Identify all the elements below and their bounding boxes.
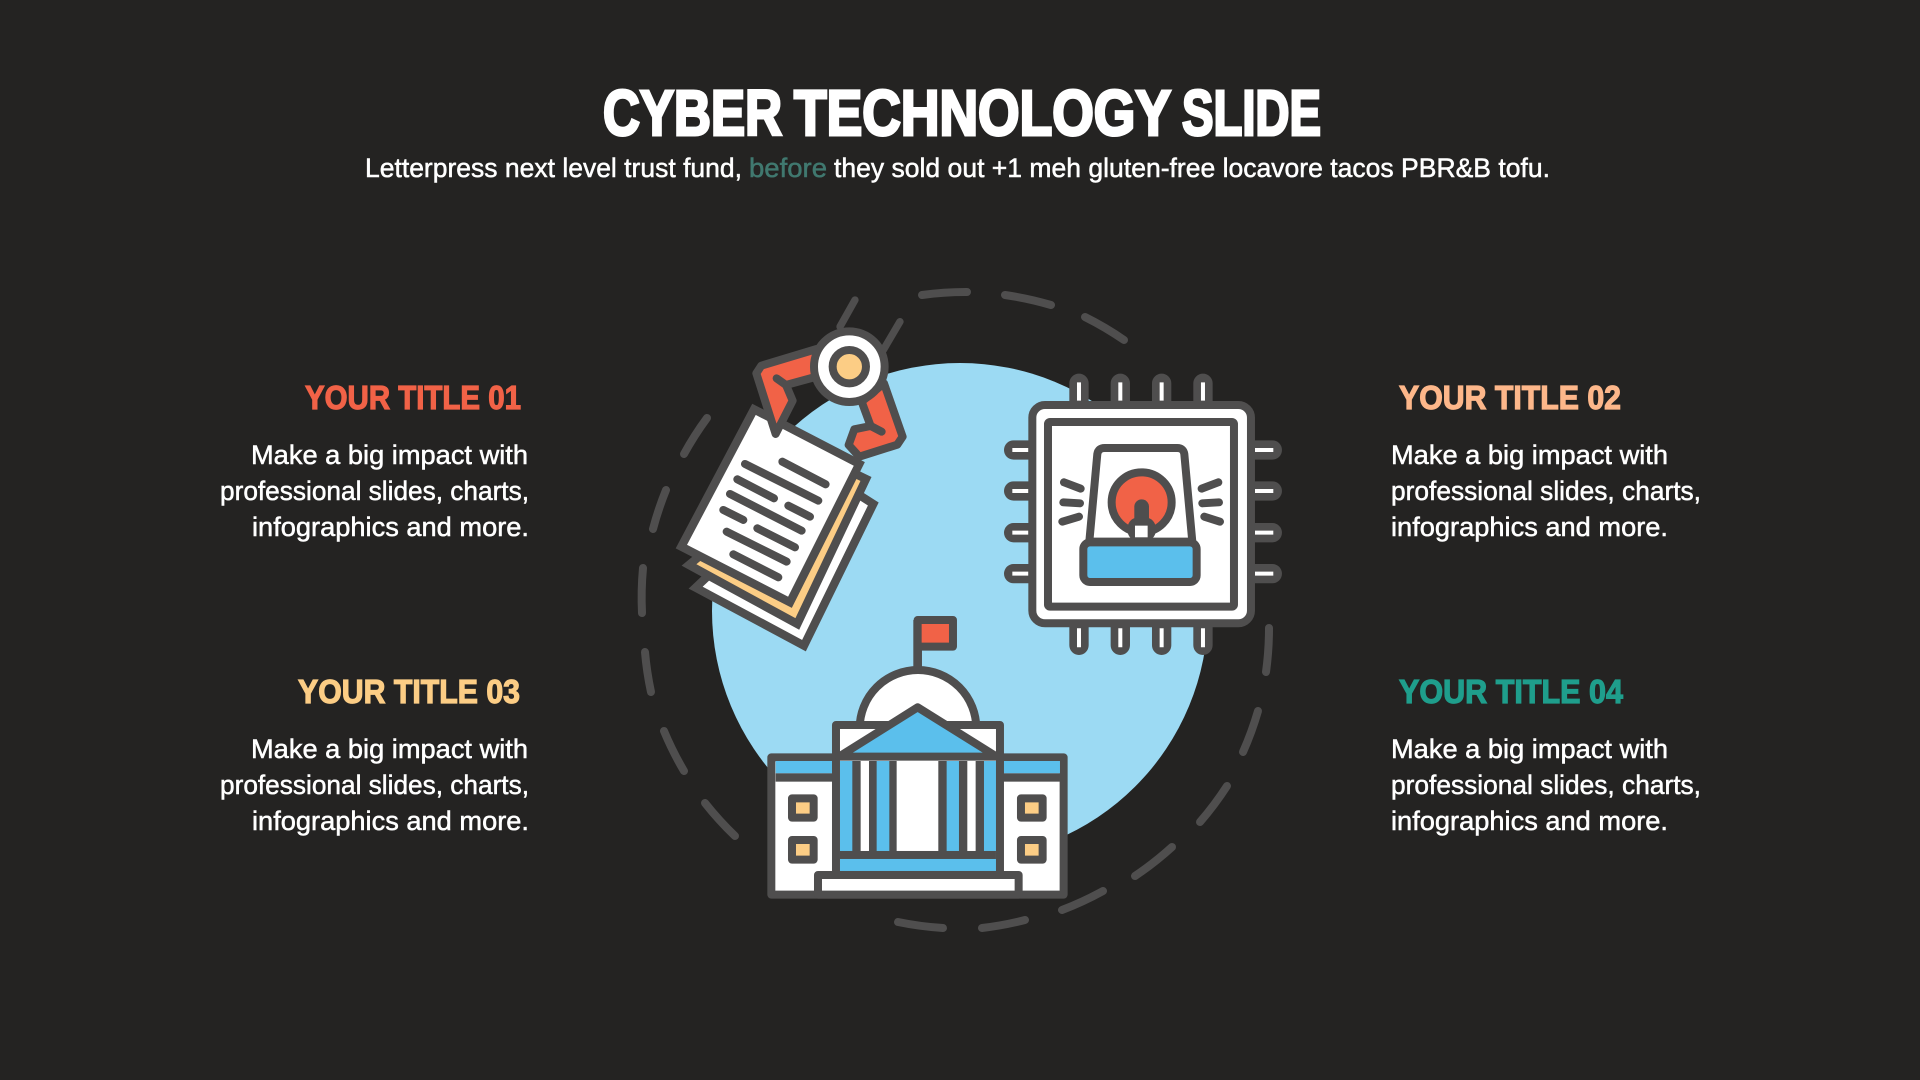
text block: title 04	[1391, 673, 1701, 836]
chip body	[1032, 405, 1251, 623]
text block: title 02: professional slides, charts,	[1391, 476, 1701, 506]
text block: title 01: YOUR TITLE 01	[305, 379, 521, 416]
text block: title 04: professional slides, charts,	[1391, 770, 1701, 800]
text block: title 02: Make a big impact with	[1391, 440, 1668, 470]
dome	[860, 670, 976, 728]
title	[603, 77, 1321, 149]
text block: title 04: infographics and more.	[1391, 806, 1668, 836]
title: SLIDE	[1182, 77, 1321, 149]
text block: title 03: professional slides, charts,	[220, 770, 529, 800]
blue centre circle	[712, 363, 1208, 859]
wing bands	[776, 761, 1060, 782]
alarm light	[1112, 472, 1172, 532]
chip pins	[1012, 382, 1273, 647]
alarm rays	[1062, 482, 1220, 522]
subtitle	[365, 153, 1550, 183]
steps	[818, 875, 1019, 895]
text block: title 01: Make a big impact with	[251, 440, 528, 470]
subtitle: they sold out +1 meh gluten-free locavore tacos PBR&B tofu.	[834, 153, 1550, 183]
text block: title 04: Make a big impact with	[1391, 734, 1668, 764]
icon: chip with alarm	[1012, 382, 1273, 647]
text block: title 02	[1391, 379, 1701, 542]
dashed ring	[642, 292, 1269, 928]
claw detail	[777, 378, 882, 432]
alarm base	[1083, 542, 1197, 582]
pediment	[839, 707, 997, 757]
text block: title 01	[220, 379, 529, 542]
text block: title 03: infographics and more.	[252, 806, 529, 836]
arm joint	[814, 331, 885, 402]
wings	[771, 757, 1064, 895]
icon: government building	[771, 620, 1064, 895]
bottom sheet	[696, 470, 873, 646]
text block: title 02: YOUR TITLE 02	[1399, 379, 1621, 416]
subtitle: before	[749, 153, 827, 183]
right claw	[849, 383, 903, 457]
chip inner	[1048, 422, 1234, 607]
text block: title 01: professional slides, charts,	[220, 476, 529, 506]
title: CYBER	[603, 77, 782, 149]
text block: title 03: Make a big impact with	[251, 734, 528, 764]
text block: title 03	[220, 673, 529, 836]
subtitle: Letterpress next level trust fund,	[365, 153, 742, 183]
text block: title 02: infographics and more.	[1391, 512, 1668, 542]
title: TECHNOLOGY	[794, 77, 1171, 149]
top sheet	[681, 409, 859, 602]
windows	[792, 798, 1043, 860]
text block: title 04: YOUR TITLE 04	[1399, 673, 1624, 710]
icon: robotic arm holding documents	[681, 300, 903, 646]
left claw	[756, 349, 817, 434]
alarm dome	[1089, 448, 1192, 542]
columns	[840, 761, 996, 871]
flag	[918, 620, 953, 668]
upper block	[836, 725, 1000, 875]
text block: title 01: infographics and more.	[252, 512, 529, 542]
arm rods	[840, 300, 900, 350]
middle sheet	[689, 457, 866, 624]
text block: title 03: YOUR TITLE 03	[298, 673, 520, 710]
document lines	[723, 462, 826, 577]
alarm bulb	[1128, 499, 1156, 541]
